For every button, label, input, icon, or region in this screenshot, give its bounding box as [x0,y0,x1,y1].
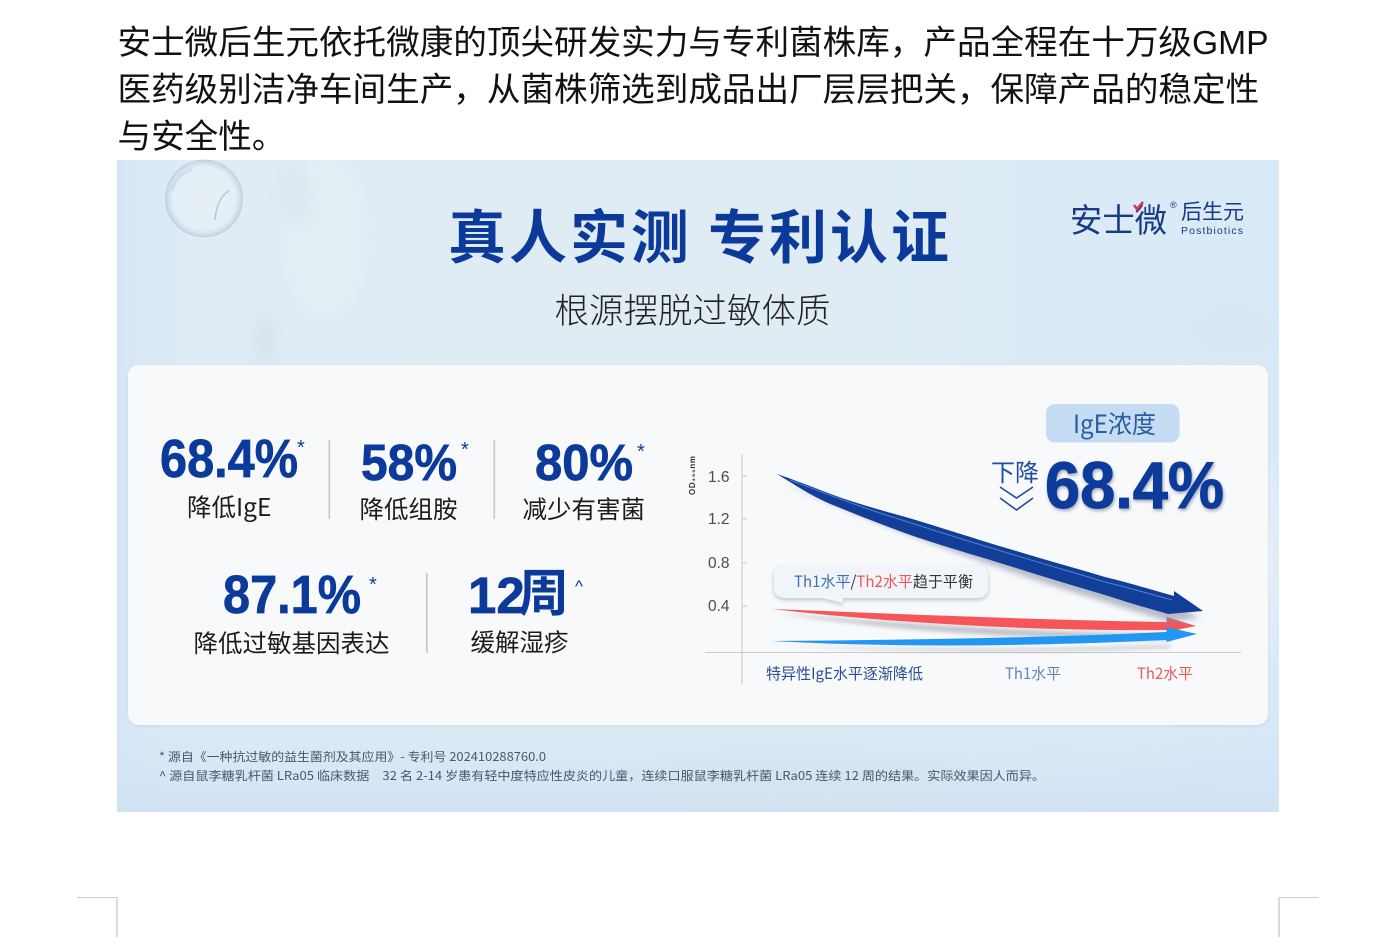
tag: IgE concentration: IgE浓度 [1073,405,1156,441]
subtitle: 根源摆脱过敏体质 [554,283,830,333]
stat: 80% reduce harmful bacteria: 减少有害菌 [522,491,645,526]
arrow: specific IgE dark blue [777,474,1203,622]
x axis legend labels [766,662,1193,684]
y tick labels: 1.2 [708,511,730,528]
x axis legend labels: 特异性IgE水平逐渐降低 [766,662,923,684]
footnotes: ^ 源自鼠李糖乳杆菌 LRa05 临床数据 32 名 2-14 岁患有轻中度特应性皮炎的儿童，连续口服鼠李糖乳杆菌 LRa05 连续 12 周的结果。实际效果因人而异。 [159,767,1045,784]
logo: 安士微 [1070,194,1167,242]
x axis legend labels: Th1水平 [1005,662,1061,684]
arrow: Th2 red [772,609,1196,640]
stat: 58% reduce histamine [360,434,469,526]
callout: drop 68.4%: 下降 [991,453,1039,488]
stat: 80% reduce harmful bacteria: * [637,441,645,463]
stat: 68.4% reduce IgE: 降低IgE [187,489,271,524]
stat: 58% reduce histamine: * [461,439,469,461]
water droplet [166,160,242,237]
stat: 80% reduce harmful bacteria: 80% [535,434,633,491]
y tick labels [708,469,730,615]
arrow: Th1 blue [770,627,1197,651]
stat: 87.1% reduce allergy gene expression: 降低过敏基因表达 [194,625,390,660]
x axis legend labels: Th2水平 [1137,662,1193,684]
callout: Th1/Th2 balance: Th1水平/Th2水平趋于平衡 [794,570,973,592]
stat: 68.4% reduce IgE: * [297,437,305,459]
axes [705,454,1241,685]
title: 真人实测 专利认证 [448,191,949,275]
divider [328,440,330,519]
stat: 87.1% reduce allergy gene expression: 87.1% [223,565,361,625]
stat: 12 weeks relieve eczema: ^ [575,577,583,596]
divider [426,573,428,653]
tag: IgE concentration [1046,404,1180,442]
logo: ® [1170,200,1177,210]
y tick labels: 1.6 [708,469,730,486]
intro paragraph: 安士微后生元依托微康的顶尖研发实力与专利菌株库，产品全程在十万级GMP [118,24,1268,62]
stat: 68.4% reduce IgE: 68.4% [160,429,298,489]
stat: 12 weeks relieve eczema: 12 [468,567,525,624]
chart: IgE trend [688,454,1241,685]
footnotes: * 源自《一种抗过敏的益生菌剂及其应用》- 专利号 202410288760.0 [159,748,546,765]
stat: 87.1% reduce allergy gene expression: * [369,574,377,596]
callout: Th1/Th2 balance [774,565,988,603]
logo [1070,194,1244,242]
stat: 87.1% reduce allergy gene expression [194,565,390,660]
stat: 68.4% reduce IgE [160,429,305,524]
stat: 58% reduce histamine: 58% [361,434,457,491]
stat: 80% reduce harmful bacteria [522,434,645,526]
divider [494,440,495,519]
panel: results card [128,365,1268,725]
stat: 12 weeks relieve eczema [468,552,583,659]
footnotes [159,748,1045,784]
stat: 58% reduce histamine: 降低组胺 [360,491,458,526]
y tick labels: 0.8 [708,555,730,572]
intro paragraph [118,24,1268,156]
crop marks [77,897,1319,937]
logo: Postbiotics [1181,225,1243,237]
y axis label: OD₄₅₀nm [688,456,697,495]
stat: 12 weeks relieve eczema: 缓解湿疹 [470,624,568,659]
callout: drop 68.4%: 68.4% [1045,448,1224,522]
y tick labels: 0.4 [708,598,730,615]
stat: 12 weeks relieve eczema: 周 [518,552,569,626]
banner background [117,155,1282,812]
logo: 后生元 [1181,196,1244,226]
intro paragraph: 与安全性。 [118,118,285,156]
intro paragraph: 医药级别洁净车间生产，从菌株筛选到成品出厂层层把关，保障产品的稳定性 [118,71,1259,109]
